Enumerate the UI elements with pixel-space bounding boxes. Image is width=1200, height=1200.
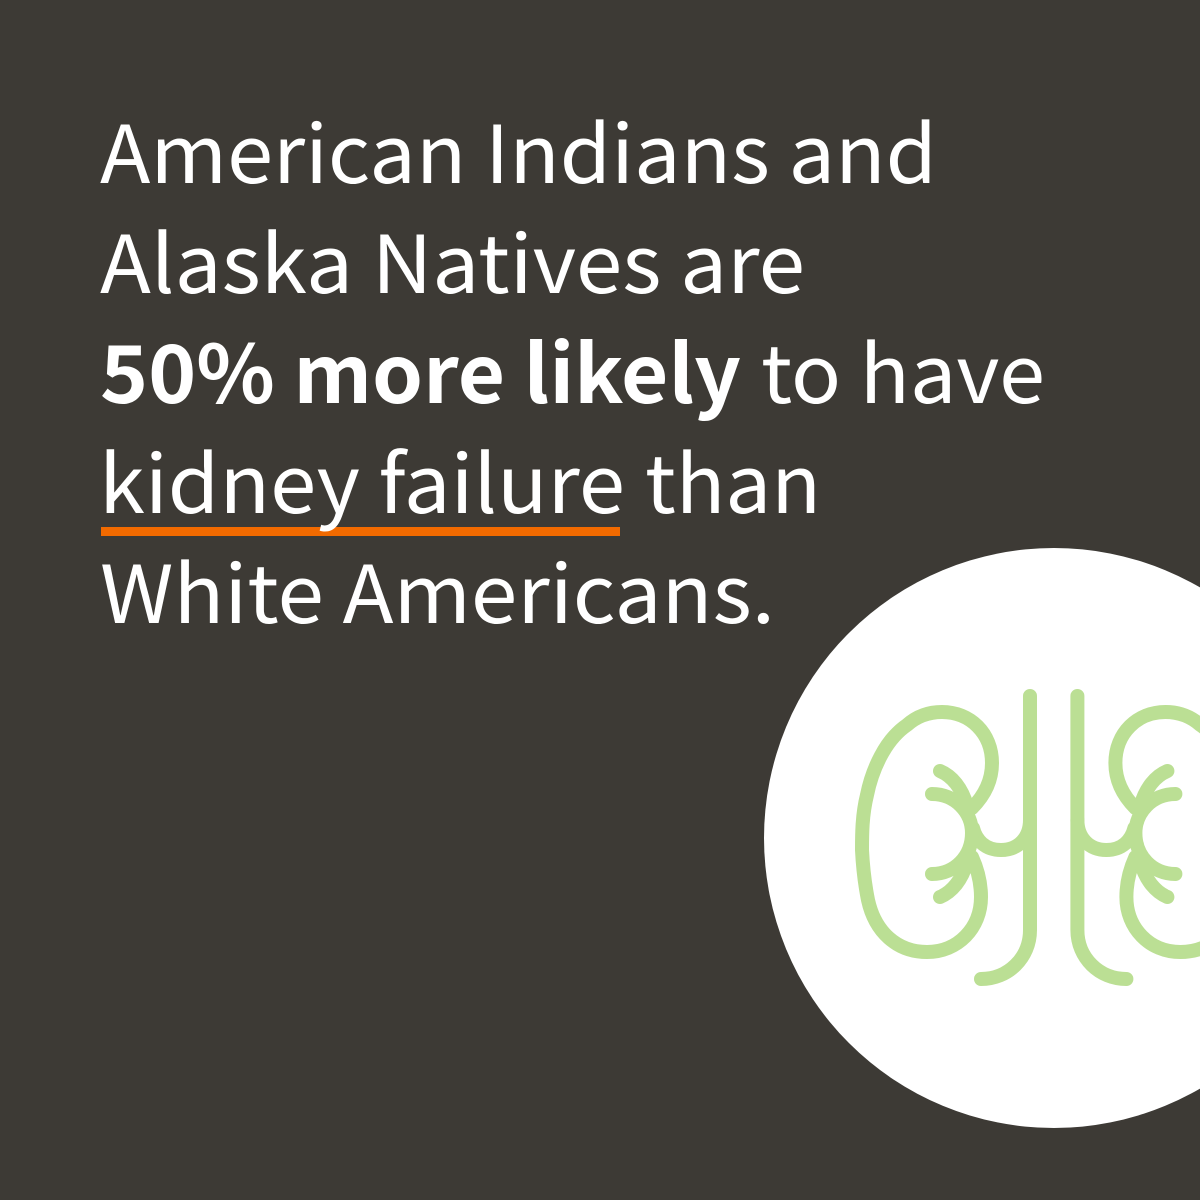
headline text: American Indians and [100, 91, 937, 207]
left kidney [862, 696, 1030, 979]
right kidney [1077, 696, 1200, 979]
headline text: kidney failure [99, 421, 625, 537]
icon: kidneys [862, 696, 1200, 979]
headline text [99, 91, 1045, 647]
headline text: to have [761, 311, 1045, 427]
headline text: White Americans. [100, 531, 775, 647]
headline text: 50% more likely [100, 311, 741, 427]
white circle [764, 548, 1200, 1128]
headline text: than [645, 421, 821, 537]
underline: kidney failure [101, 527, 620, 536]
headline text: Alaska Natives are [100, 201, 805, 317]
